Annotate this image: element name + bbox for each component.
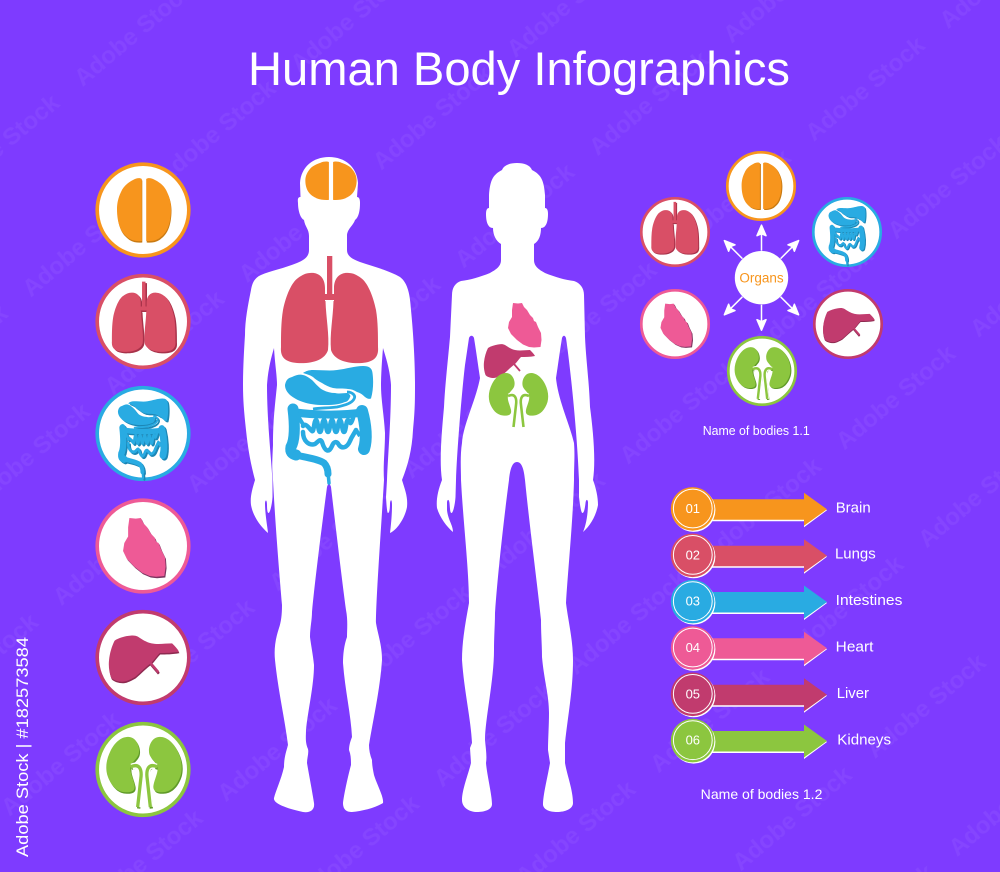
row 01 brain — [671, 487, 871, 532]
row 05 liver — [671, 672, 869, 717]
male body figure — [243, 157, 415, 812]
row 04 heart: Heart — [836, 638, 874, 656]
organ: kidneys on female — [489, 373, 548, 427]
icon: liver small — [814, 290, 882, 358]
female body figure — [437, 163, 598, 812]
arrows from hub — [721, 225, 802, 330]
row 05 liver: 05 — [686, 686, 700, 701]
panel: organ icon column — [97, 164, 189, 815]
icon: lungs — [97, 276, 189, 367]
row 04 heart — [671, 626, 874, 671]
panel: numbered arrow list — [671, 487, 902, 764]
organ: heart on female — [508, 303, 542, 348]
organ: intestines on male — [285, 366, 373, 483]
hub: organs: Organs — [739, 270, 784, 286]
icon: intestines — [97, 388, 189, 480]
row 02 lungs — [671, 534, 876, 578]
row 03 intestines: 03 — [686, 594, 700, 609]
caption: name of bodies 1.1: Name of bodies 1.1 — [703, 424, 810, 438]
stock credit: Adobe Stock | #182573584 — [13, 637, 32, 857]
row 03 intestines — [671, 580, 902, 625]
hub: organs — [735, 251, 788, 304]
icon: liver — [97, 612, 189, 703]
male silhouette — [243, 157, 415, 812]
organ: liver on female — [484, 344, 535, 378]
icon: kidneys small — [728, 337, 796, 405]
row 06 kidneys: Kidneys — [837, 732, 891, 748]
female silhouette — [437, 163, 598, 812]
row 01 brain: 01 — [686, 501, 700, 516]
row 04 heart: 04 — [686, 640, 700, 655]
organ: brain on male — [305, 162, 357, 200]
row 05 liver: Liver — [837, 685, 869, 702]
row 03 intestines: Intestines — [836, 592, 902, 609]
row 06 kidneys: 06 — [686, 733, 700, 748]
organ: lungs on male — [281, 256, 378, 363]
row 06 kidneys — [671, 719, 891, 764]
row 02 lungs: Lungs — [835, 546, 876, 563]
row 02 lungs: 02 — [686, 547, 700, 562]
icon: kidneys — [97, 724, 189, 815]
icon: heart — [97, 500, 189, 592]
icon: heart small — [641, 290, 709, 358]
title: Human Body Infographics — [248, 42, 790, 95]
caption: name of bodies 1.2: Name of bodies 1.2 — [701, 786, 823, 802]
icon: brain small — [727, 152, 795, 220]
icon: intestines small — [813, 198, 881, 266]
icon: brain — [97, 164, 189, 256]
panel: organs radial diagram — [641, 152, 882, 405]
icon: lungs small — [641, 198, 709, 266]
row 01 brain: Brain — [836, 499, 871, 516]
